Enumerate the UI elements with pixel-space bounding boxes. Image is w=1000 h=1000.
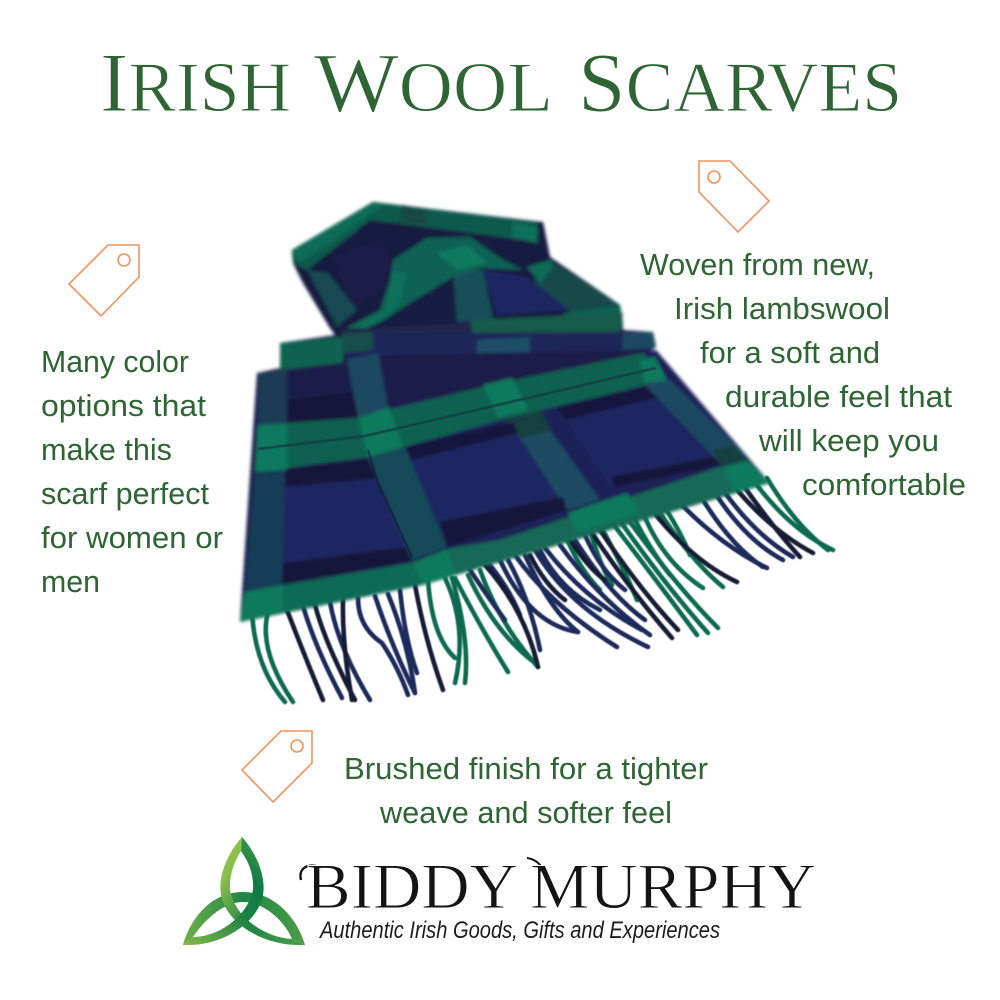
- text block: lambswool: comfortable: [802, 467, 966, 502]
- text block: lambswool: durable feel that: [725, 379, 952, 414]
- text block: color options: for women or: [41, 520, 223, 555]
- twisted fold: [347, 237, 523, 328]
- text block: color options: [41, 344, 223, 599]
- logo: brand name: BIDDY: [306, 851, 518, 923]
- icon: price tag left: [69, 245, 139, 316]
- title: WOOL: [314, 36, 553, 130]
- text block: color options: make this: [41, 432, 172, 467]
- scarf plaid fine lines: [258, 368, 656, 557]
- title: [100, 36, 902, 130]
- front left panel: [240, 362, 422, 622]
- text block: color options: men: [41, 564, 100, 599]
- title: SCARVES: [578, 36, 902, 130]
- text block: color options: Many color: [41, 344, 189, 379]
- logo: trinity knot: [183, 837, 305, 945]
- logo: tagline: Authentic Irish Goods, Gifts and Experiences: [318, 917, 720, 944]
- rolled layer: [280, 337, 343, 372]
- text block: brushed finish: weave and softer feel: [379, 795, 672, 830]
- scarf photo illustration: [240, 202, 770, 622]
- text block: lambswool: Woven from new,: [640, 247, 875, 282]
- text block: color options: options that: [41, 388, 206, 423]
- vertical stripes: [347, 353, 388, 417]
- upper green band: [358, 353, 667, 457]
- text block: lambswool: for a soft and: [700, 335, 880, 370]
- scarf silhouette base: [240, 202, 770, 622]
- lower green band: [412, 460, 770, 585]
- hood navy panels: [483, 270, 570, 315]
- text block: brushed finish: Brushed finish for a tighter: [344, 751, 708, 786]
- logo: brand name: [300, 851, 816, 923]
- hood back: [292, 202, 623, 338]
- navy blocks: [405, 423, 567, 547]
- text block: lambswool: will keep you: [758, 423, 939, 458]
- icon: price tag top right: [699, 161, 769, 232]
- title: IRISH: [100, 36, 291, 130]
- front right panel: [347, 350, 770, 585]
- text block: color options: scarf perfect: [41, 476, 209, 511]
- text block: lambswool: Irish lambswool: [674, 291, 890, 326]
- logo: brand name: MURPHY: [530, 851, 816, 923]
- text block: brushed finish: [344, 751, 708, 830]
- band under hood: [470, 313, 623, 336]
- icon: price tag bottom: [242, 731, 312, 802]
- scarf fringe: [252, 478, 833, 702]
- text block: lambswool: [640, 247, 966, 502]
